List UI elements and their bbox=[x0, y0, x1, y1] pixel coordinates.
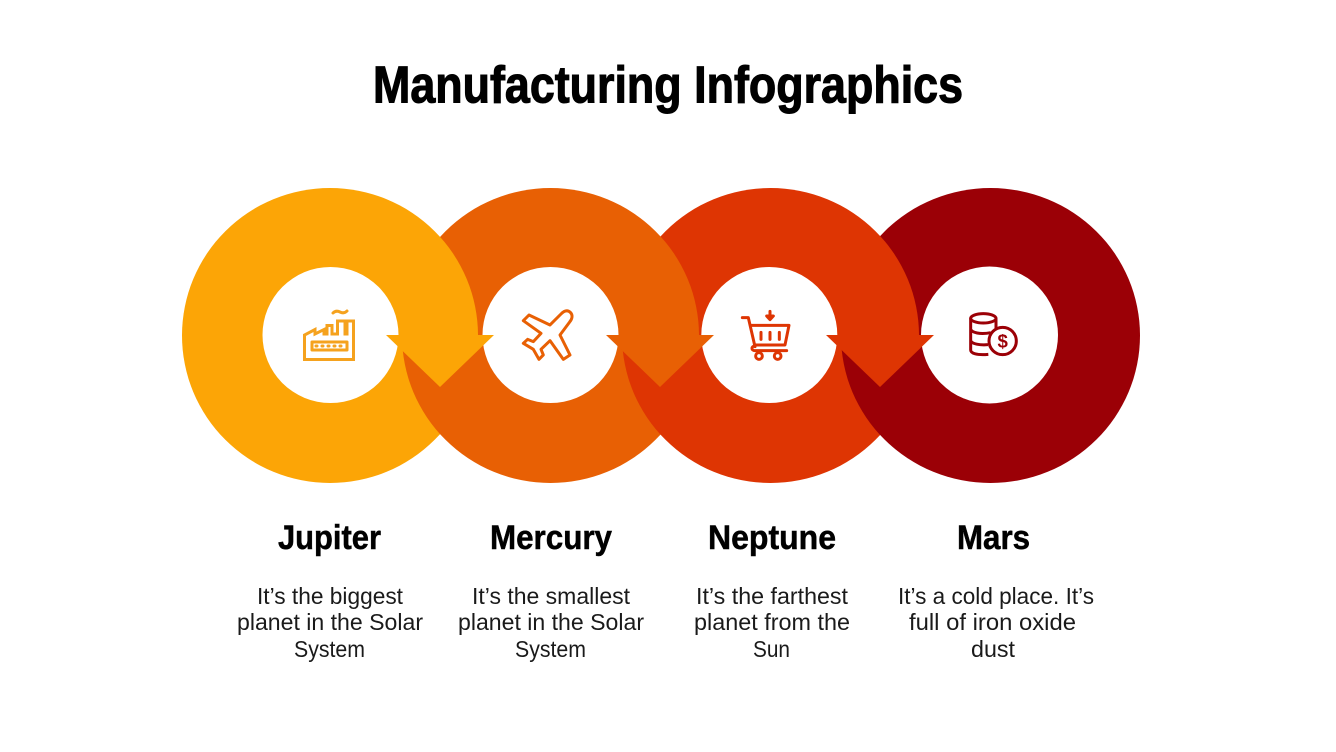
text: Mercury description: planet in the Solar bbox=[458, 609, 644, 635]
text: Jupiter description: planet in the Solar bbox=[237, 609, 423, 635]
text: Mercury description: System bbox=[515, 636, 586, 662]
text: Mars description: dust bbox=[971, 636, 1016, 662]
rings: lower halves, right ring on top bbox=[182, 335, 1140, 483]
arrow: Mercury to Neptune bbox=[606, 335, 714, 387]
ring holes bbox=[262, 266, 1058, 404]
text: Neptune description: It’s the farthest bbox=[696, 583, 849, 609]
icon: coins: $ bbox=[997, 331, 1008, 352]
text: Mercury description: It’s the smallest bbox=[472, 583, 631, 609]
heading: Mercury: Mercury bbox=[490, 519, 612, 557]
text: Mars description: full of iron oxide bbox=[909, 609, 1076, 635]
text: Jupiter description bbox=[237, 583, 423, 662]
heading: Mars: Mars bbox=[957, 519, 1030, 557]
arrow: Neptune to Mars bbox=[826, 335, 934, 387]
heading: Jupiter: Jupiter bbox=[278, 519, 381, 557]
icon: coins bbox=[971, 314, 1016, 355]
text: Jupiter description: It’s the biggest bbox=[257, 583, 404, 609]
arrow: Jupiter to Mercury bbox=[386, 335, 494, 387]
title: Manufacturing Infographics bbox=[373, 56, 963, 114]
rings: upper halves, left ring on top bbox=[182, 188, 1140, 335]
text: Neptune description: Sun bbox=[753, 636, 790, 662]
panel: Jupiter bbox=[237, 519, 423, 662]
text: Jupiter description: System bbox=[294, 636, 365, 662]
panel: Mars bbox=[898, 519, 1094, 662]
icon: shopping cart bbox=[742, 311, 789, 359]
icon: factory bbox=[304, 311, 354, 360]
text: Neptune description: planet from the bbox=[694, 609, 850, 635]
panel: Neptune bbox=[694, 519, 850, 662]
text: Mars description: It’s a cold place. It’s bbox=[898, 583, 1094, 609]
text: Mars description bbox=[898, 583, 1094, 662]
panel: Mercury bbox=[458, 519, 644, 662]
text: Mercury description bbox=[458, 583, 644, 662]
heading: Neptune: Neptune bbox=[708, 519, 836, 557]
icon: airplane bbox=[523, 311, 572, 359]
text: Neptune description bbox=[694, 583, 850, 662]
interlocked ring chain bbox=[182, 188, 1140, 483]
